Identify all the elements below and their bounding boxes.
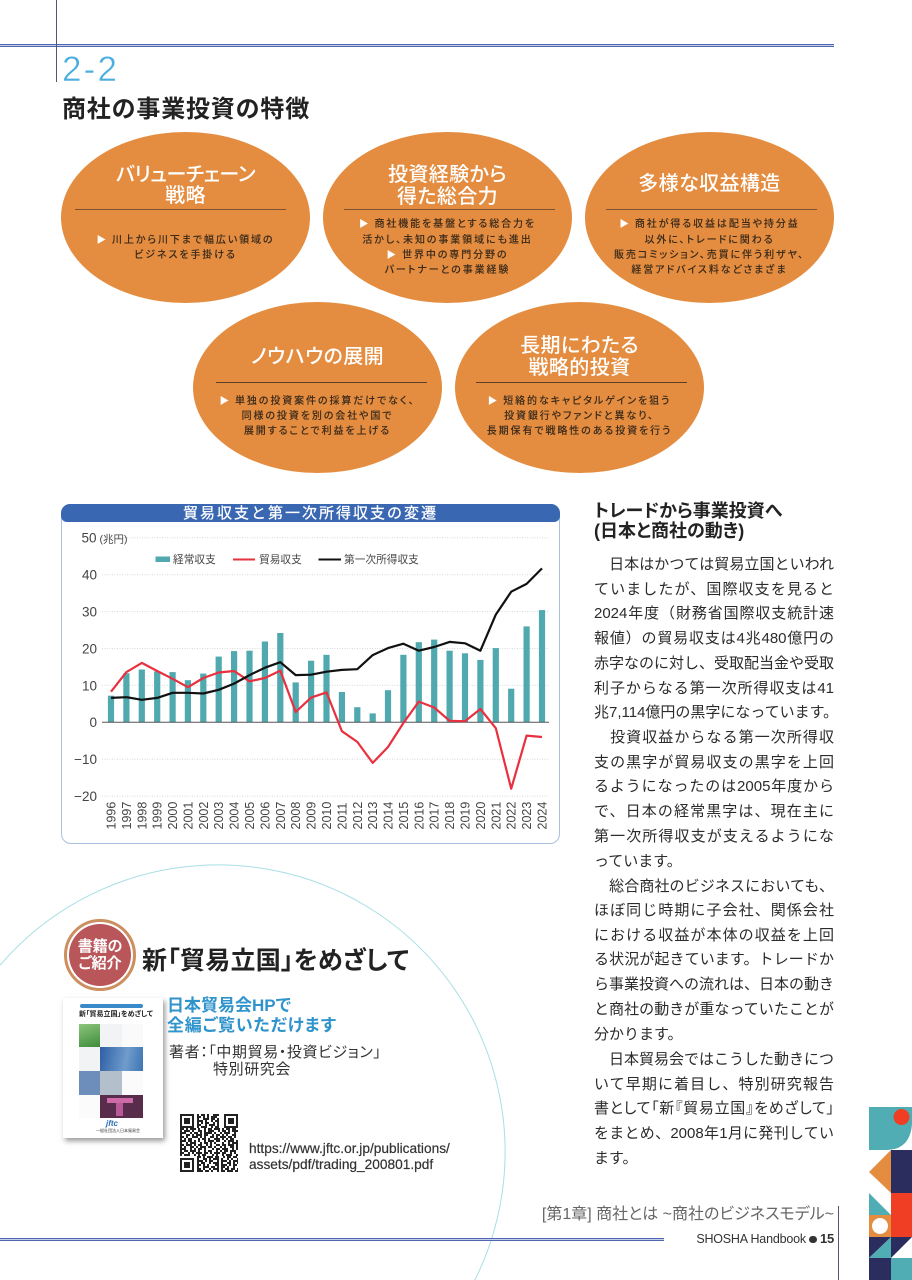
badge: book introduction: 書籍の (78, 938, 122, 955)
y axis labels: 20 (82, 642, 97, 656)
x axis year labels: 2014 (382, 802, 396, 830)
right column article text: るようになったのは2005年度から (594, 778, 834, 795)
x axis year labels: 1996 (104, 802, 118, 830)
right column article text: 利子からなる第一次所得収支は41 (594, 680, 834, 697)
legend: 貿易収支 (259, 553, 302, 566)
author credit: 著者：「中期貿易・投資ビジョン」 (169, 1044, 381, 1061)
panel: value chain strategy: 戦略 (165, 185, 206, 207)
panel: comprehensive strength: ▶商社機能を基盤とする総合力を (359, 219, 536, 230)
x axis year labels: 2022 (505, 802, 519, 830)
legend: 経常収支 (173, 553, 216, 566)
book section title: 新「貿易立国」をめざして (142, 947, 409, 975)
x axis year labels: 2002 (197, 802, 211, 830)
x axis year labels: 2006 (258, 802, 272, 830)
x axis year labels: 2008 (289, 802, 303, 830)
x axis year labels: 2017 (428, 802, 442, 830)
panel: diverse revenue structure: 販売コミッション、売買に伴う利ザヤ、 (614, 250, 805, 261)
x axis year labels: 2013 (366, 802, 380, 830)
right column article text: における収益が本体の収益を上回 (594, 927, 834, 944)
header vertical rule (56, 0, 57, 82)
y axis labels: 30 (82, 604, 97, 620)
top header rule (0, 44, 834, 47)
right column article text: 書として「新『貿易立国』をめざして」 (594, 1100, 834, 1117)
publication URL: https://www.jftc.or.jp/publications/ (249, 1141, 450, 1156)
panel: know-how rollout (193, 302, 442, 473)
panel: diverse revenue structure: 多様な収益構造 (638, 173, 781, 195)
line: primary income (111, 568, 542, 700)
right column article text: 赤字なのに対し、受取配当金や受取 (594, 655, 834, 672)
line: trade balance (111, 663, 542, 789)
publication URL (249, 1141, 450, 1172)
x axis year labels: 2015 (397, 802, 411, 830)
blue note: read on website: 全編ご覧いただけます (167, 1016, 337, 1034)
x axis year labels: 2012 (351, 802, 365, 830)
y axis labels: −20 (74, 789, 97, 804)
panel: long-term strategic investment: 投資銀行やファンドと異なり、 (504, 411, 655, 422)
right column article text: 日本はかつては貿易立国といわれ (609, 556, 834, 573)
panel: long-term strategic investment (455, 302, 704, 473)
y axis labels: −10 (74, 752, 97, 767)
x axis year labels: 2009 (305, 802, 319, 830)
panel: comprehensive strength: 活かし、未知の事業領域にも進出 (362, 235, 533, 246)
y axis labels: 0 (89, 715, 97, 730)
right column article text: 第一次所得収支が支えるようにな (594, 828, 834, 845)
right column article text: 分かります。 (594, 1026, 683, 1043)
x axis year labels: 1998 (135, 802, 149, 830)
x axis year labels (104, 802, 550, 830)
panel: value chain strategy: バリューチェーン (116, 164, 255, 186)
right column article text: 2024年度（財務省国際収支統計速 (594, 605, 834, 622)
panel: comprehensive strength (323, 132, 572, 303)
x axis year labels: 2021 (489, 802, 503, 830)
footer handbook and page number: SHOSHA Handbook 15 (696, 1231, 834, 1246)
right column article text: 投資収益からなる第一次所得収 (610, 729, 834, 746)
panel: know-how rollout: ▶単独の投資案件の採算だけでなく、 (219, 396, 416, 407)
badge: book introduction: ご紹介 (78, 955, 122, 972)
book cover (63, 998, 163, 1138)
section number: 2-2 (62, 50, 119, 89)
book cover: 新「貿易立国」をめざして (79, 1011, 153, 1018)
panel: long-term strategic investment: 長期にわたる (520, 335, 639, 357)
right column article text: 総合商社のビジネスにおいても、 (609, 878, 834, 895)
panel: know-how rollout: 同様の投資を別の会社や国で (242, 411, 393, 422)
author credit: 特別研究会 (213, 1061, 291, 1078)
panel: diverse revenue structure (585, 132, 834, 303)
legend: 第一次所得収支 (344, 553, 419, 566)
right column heading: トレードから事業投資へ (594, 501, 782, 521)
right column article text: で、日本の経常黒字は、現在主に (594, 803, 834, 820)
panel: chart frame (61, 504, 560, 844)
x axis year labels: 2016 (412, 802, 426, 830)
right column article text: ていましたが、国際収支を見ると (594, 581, 834, 598)
right column article text: 日本貿易会ではこうした動きにつ (609, 1051, 834, 1068)
page title: 商社の事業投資の特徴 (62, 96, 310, 123)
panel: long-term strategic investment: ▶短絡的なキャピタルゲインを狙う (488, 396, 671, 407)
right column article text: いて早期に着目し、特別研究報告 (594, 1076, 834, 1093)
x axis year labels: 2007 (274, 802, 288, 830)
x axis year labels: 2004 (228, 802, 242, 830)
x axis year labels: 2001 (182, 802, 196, 830)
x axis year labels: 2003 (212, 802, 226, 830)
book cover: 一般社団法人日本貿易会 (96, 1128, 140, 1133)
blue note: read on website: 日本貿易会HPで (167, 996, 291, 1015)
y axis labels (74, 568, 97, 804)
book cover: jftc (106, 1119, 118, 1128)
x axis year labels: 2010 (320, 802, 334, 830)
y axis labels: 10 (82, 678, 97, 694)
publication URL: assets/pdf/trading_200801.pdf (249, 1156, 433, 1172)
panel: comprehensive strength: パートナーとの事業経験 (385, 265, 510, 276)
QR code (180, 1114, 238, 1172)
x axis year labels: 2020 (474, 802, 488, 830)
panel: long-term strategic investment: 長期保有で戦略性のある投資を行う (487, 426, 672, 437)
right column article text: 兆7,114億円の黒字になっています。 (594, 704, 838, 721)
right column article text: ら事業投資への流れは、日本の動き (594, 976, 834, 993)
x axis year labels: 1997 (120, 802, 134, 830)
panel: diverse revenue structure: 経営アドバイス料などさまざま (631, 265, 788, 276)
decorative geometric tiles (869, 1107, 912, 1280)
panel: value chain strategy: ▶川上から川下まで幅広い領域の (96, 235, 274, 246)
right column article text: ほぼ同じ時期に子会社、関係会社 (594, 902, 834, 919)
right column heading (594, 501, 782, 541)
chart title bar (61, 504, 560, 522)
panel: value chain strategy (61, 132, 310, 303)
x axis year labels: 2023 (520, 802, 534, 830)
x axis year labels: 2019 (458, 802, 472, 830)
y axis labels: 40 (82, 568, 97, 582)
panel: know-how rollout: 展開することで利益を上げる (244, 426, 391, 437)
panel: comprehensive strength: 投資経験から (388, 164, 507, 186)
x axis year labels: 2011 (335, 803, 349, 830)
right column heading: (日本と商社の動き) (594, 521, 744, 541)
y axis top label: 50 (兆円) (82, 530, 128, 546)
footer rule (0, 1238, 664, 1241)
right column article text: をまとめ、2008年1月に発刊してい (594, 1125, 834, 1142)
legend (156, 553, 419, 566)
panel: diverse revenue structure: ▶商社が得る収益は配当や持分益 (619, 219, 800, 230)
chart title bar: 貿易収支と第一次所得収支の変遷 (183, 505, 438, 522)
panel: comprehensive strength: 得た総合力 (397, 186, 498, 208)
right column article text: と商社の動きが重なっていたことが (594, 1001, 834, 1018)
right column article text: ます。 (594, 1150, 638, 1167)
footer chapter label: [第1章] 商社とは ~商社のビジネスモデル~ (542, 1206, 834, 1223)
panel: diverse revenue structure: 以外に、トレードに関わる (644, 235, 775, 246)
x axis year labels: 2024 (536, 802, 550, 830)
panel: know-how rollout: ノウハウの展開 (251, 346, 384, 368)
author credit (169, 1044, 381, 1078)
bars: current account (108, 610, 545, 722)
footer vertical rule (838, 1206, 839, 1280)
right column article text: る状況が起きています。トレードか (594, 951, 834, 968)
right column article text: 報値）の貿易収支は4兆480億円の (594, 630, 834, 647)
blue note: read on website (167, 996, 337, 1034)
panel: value chain strategy: ビジネスを手掛ける (134, 250, 237, 261)
x axis year labels: 2000 (166, 802, 180, 830)
panel: comprehensive strength: ▶世界中の専門分野の (387, 250, 508, 261)
x axis year labels: 2005 (243, 802, 257, 830)
badge: book introduction (64, 919, 136, 991)
x axis year labels: 2018 (443, 802, 457, 830)
x axis year labels: 1999 (151, 802, 165, 830)
panel: long-term strategic investment: 戦略的投資 (528, 357, 630, 379)
right column article text: っています。 (594, 853, 682, 870)
right column article text: 支の黒字が貿易収支の黒字を上回 (594, 754, 834, 771)
